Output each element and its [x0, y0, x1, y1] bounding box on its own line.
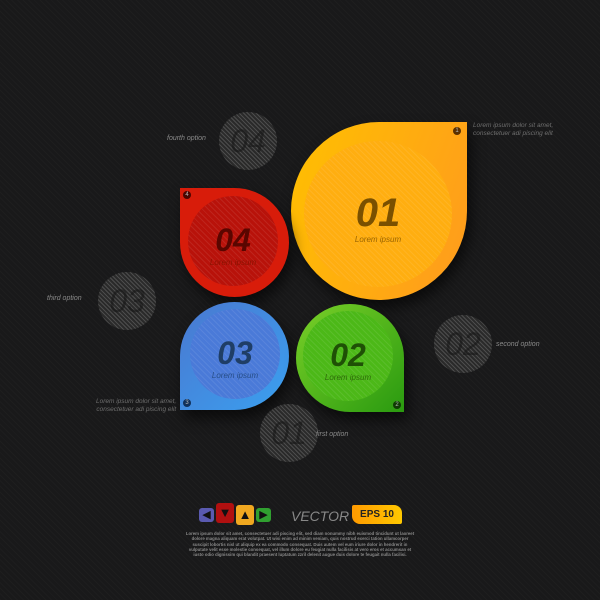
drop: 04 red — [180, 188, 289, 297]
text top right: Lorem ipsum dolor sit amet, — [473, 122, 553, 129]
text top right — [473, 122, 553, 137]
badge 3 — [183, 399, 191, 407]
footer icons — [199, 503, 271, 525]
badge 2 — [393, 401, 401, 409]
badge 3: 3 — [185, 400, 189, 406]
text bottom left — [96, 398, 176, 413]
VECTOR text: VECTOR — [291, 508, 349, 524]
gray circle 02 — [434, 315, 492, 373]
badge 2: 2 — [395, 402, 399, 408]
label second option: second option — [496, 341, 540, 348]
drop: 03 blue: 03 — [217, 335, 253, 371]
inner circle 01: Lorem ipsum — [355, 235, 401, 244]
gray circle 03: 03 — [109, 283, 145, 319]
EPS 10 badge: EPS 10 — [360, 509, 394, 520]
text bottom left: Lorem ipsum dolor sit amet, — [96, 398, 176, 405]
footer paragraph: Lorem ipsum dolor sit amet, consectetuer adi piscing elit, sed diam nonummy nibh euismod tincidunt ut laoreet dolore magna aliquam erat volutpat. Ut wisi enim ad minim veniam, quis nostrud exerci tation ullamcorper suscipit lobortis nisl ut aliquip ex ea commodo consequat. Duis autem vel eum iriure dolor in hendrerit in vulputate velit esse molestie consequat, vel illum dolore eu feugiat nulla facilisis at vero eros et accumsan et iusto odio dignissim qui blandit praesent luptatum zzril delenit augue duis dolore te feugait nulla facilisi. — [186, 531, 414, 557]
text bottom left: consectetuer adi piscing elit — [96, 406, 176, 413]
drop: 02 green: Lorem ipsum — [325, 373, 371, 382]
footer icons: ▶ — [259, 509, 268, 521]
label third option: third option — [47, 295, 82, 302]
badge 4 — [183, 191, 191, 199]
gray circle 01 — [260, 404, 318, 462]
footer icons: ▲ — [239, 507, 251, 522]
EPS 10 badge — [352, 505, 402, 524]
drop: 02 green — [296, 304, 404, 412]
text top right: consectetuer adi piscing elit — [473, 130, 553, 137]
drop: 01 yellow — [291, 122, 467, 300]
gray circle 04: 04 — [230, 123, 266, 159]
drop: 02 green: 02 — [330, 337, 366, 373]
footer icons: ▼ — [219, 505, 231, 520]
label first option: first option — [316, 431, 348, 438]
label fourth option: fourth option — [167, 135, 206, 142]
drop: 03 blue: Lorem ipsum — [212, 371, 258, 380]
gray circle 02: 02 — [445, 326, 481, 362]
drop: 04 red: 04 — [215, 222, 251, 258]
badge 4: 4 — [185, 192, 189, 198]
gray circle 03 — [98, 272, 156, 330]
inner circle 01: 01 — [356, 191, 400, 235]
gray circle 04 — [219, 112, 277, 170]
badge 1 — [453, 127, 461, 135]
drop: 03 blue — [180, 302, 289, 410]
badge 1: 1 — [455, 128, 459, 134]
footer icons: ◀ — [202, 509, 211, 521]
inner circle 01 — [304, 141, 452, 287]
drop: 04 red: Lorem ipsum — [210, 258, 256, 267]
gray circle 01: 01 — [271, 415, 307, 451]
